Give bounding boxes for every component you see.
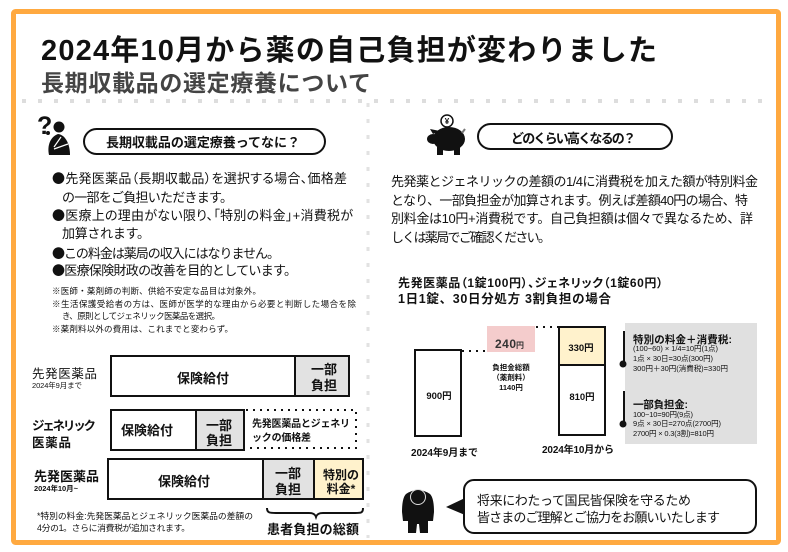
footnote: special fee: 4分の1。さらに消費税が追加されます。 [37,522,190,533]
panel: what is the selective treatment [37,112,356,334]
bar: generic drug: 一部 [206,418,232,433]
bullet list: ●医療保険財政の改善を目的としています。 [52,260,297,279]
icon: piggy bank with yen coin: ¥ [445,117,450,126]
heading pill: what is it [84,129,325,154]
brace: total patient burden [267,508,363,537]
icon: person with question mark: ? [37,112,52,140]
bar: brand drug until Sep 2024: 先発医薬品 [32,367,97,381]
notes: き、原則としてジェネリック医薬品を選択。 [62,311,220,321]
difference: 240 yen: 240 [495,337,516,351]
chart: cost comparison [411,326,614,459]
bar: brand drug from Oct 2024: 一部 [275,466,301,481]
total burden label [492,362,530,392]
bar: brand drug until Sep 2024 [32,356,349,396]
column: from Oct 2024 [542,327,614,456]
special fee calculation: 特別の料金＋消費税: [633,333,732,346]
notes [52,286,356,334]
special fee calculation: 1点 × 30日=30点(300円) [633,354,714,363]
special fee calculation: (100−60) × 1/4=10円(1点) [633,344,718,353]
bullet list: の一部をご負担いただきます。 [62,190,233,205]
speech bubble: closing message [446,480,756,533]
bar: brand drug until Sep 2024: 負担 [311,378,337,393]
bar: brand drug until Sep 2024: 2024年9月まで [32,380,82,390]
brace: total patient burden: 患者負担の総額 [267,522,359,537]
bullet list: ●この料金は薬局の収入にはなりません。 [52,243,280,262]
explanation paragraph: となり、一部負担金が加算されます。例えば差額40円の場合、特 [391,193,748,208]
total burden label: 1140円 [499,383,523,392]
difference: 240 yen [487,326,535,352]
column: from Oct 2024: 810円 [569,392,595,403]
partial payment calculation [633,398,722,438]
icon: person with question mark [37,112,70,155]
bar: generic drug: ジェネリック [32,419,96,433]
bar: generic drug: 保険給付 [121,423,173,438]
special fee calculation [633,333,732,373]
example conditions heading [398,275,663,306]
explanation paragraph: 別料金は10円+消費税です。自己負担額は個々で異なるため、詳 [391,211,753,226]
bar: generic drug [32,410,356,450]
bracket: partial payment [620,391,626,428]
bar: generic drug: 医薬品 [32,435,71,450]
panel: calculation breakdown [620,323,757,444]
explanation paragraph [391,174,758,245]
notes: ※医師・薬剤師の判断、供給不安定な品目は対象外。 [52,286,261,296]
explanation paragraph: 先発薬とジェネリックの差額の1/4に消費税を加えた額が特別料金 [391,174,758,189]
panel: how much more expensive [391,115,758,245]
partial payment calculation: 一部負担金: [633,398,688,411]
footnote: special fee: *特別の料金:先発医薬品とジェネリック医薬品の差額の [37,510,253,521]
heading pill: how much [478,124,672,149]
bar: brand drug from Oct 2024: 先発医薬品 [34,469,99,484]
difference: 240 yen: 円 [516,341,524,350]
column: until Sep 2024 [411,350,478,459]
bar: generic drug: 先発医薬品とジェネリ [252,417,350,430]
icon: bowing person [402,490,434,533]
subtitle: 長期収載品の選定療養について [41,70,371,96]
total burden label: 負担金総額 [492,362,530,372]
bullet list: 加算されます。 [62,226,150,241]
bar: generic drug: 負担 [206,433,232,448]
partial payment calculation: 9点 × 30日=270点(2700円) [633,419,722,428]
bracket: special fee [620,331,626,368]
example conditions heading: 1日1錠、30日分処方 3割負担の場合 [398,291,611,306]
bar: brand drug from Oct 2024: 負担 [275,482,301,497]
bar: brand drug from Oct 2024 [34,459,363,499]
total burden label: （薬剤料） [492,372,530,382]
column: from Oct 2024: 330円 [568,343,594,354]
speech bubble: closing message: 将来にわたって国民皆保険を守るため [477,493,691,508]
bar: brand drug from Oct 2024: 料金* [327,481,356,496]
bullet list [52,168,353,279]
bar: brand drug from Oct 2024: 特別の [323,467,359,482]
bar: brand drug until Sep 2024: 保険給付 [177,371,229,386]
partial payment calculation: 100−10=90円(9点) [633,410,694,419]
bar: brand drug from Oct 2024: 保険給付 [158,474,210,489]
column: until Sep 2024: 2024年9月まで [411,446,478,459]
icon: piggy bank with yen coin [427,115,465,155]
bullet list: ●医療上の理由がない限り、「特別の料金」+消費税が [52,205,353,224]
column: until Sep 2024: 900円 [426,391,452,402]
footnote: special fee [37,510,253,533]
heading pill: how much: どのくらい高くなるの？ [511,131,636,146]
heading pill: what is it: 長期収載品の選定療養ってなに？ [106,135,300,150]
bar: generic drug: ックの価格差 [252,431,311,444]
example conditions heading: 先発医薬品（1錠100円）、ジェネリック（1錠60円） [398,275,663,290]
bar: brand drug until Sep 2024: 一部 [311,362,337,377]
title: 2024年10月から薬の自己負担が変わりました [41,33,657,67]
bullet list: ●先発医薬品（長期収載品）を選択する場合、価格差 [52,168,347,187]
column: from Oct 2024: 2024年10月から [542,443,614,456]
explanation paragraph: しくは薬局でご確認ください。 [391,230,551,245]
notes: ※生活保護受給者の方は、医師が医学的な理由から必要と判断した場合を除 [52,299,356,309]
notes: ※薬剤料以外の費用は、これまでと変わらず。 [52,324,233,334]
partial payment calculation: 2700円 × 0.3(3割)=810円 [633,428,714,438]
special fee calculation: 300円＋30円(消費税)=330円 [633,363,728,373]
speech bubble: closing message: 皆さまのご理解とご協力をお願いいたします [477,510,720,525]
bar: brand drug from Oct 2024: 2024年10月~ [34,483,79,493]
